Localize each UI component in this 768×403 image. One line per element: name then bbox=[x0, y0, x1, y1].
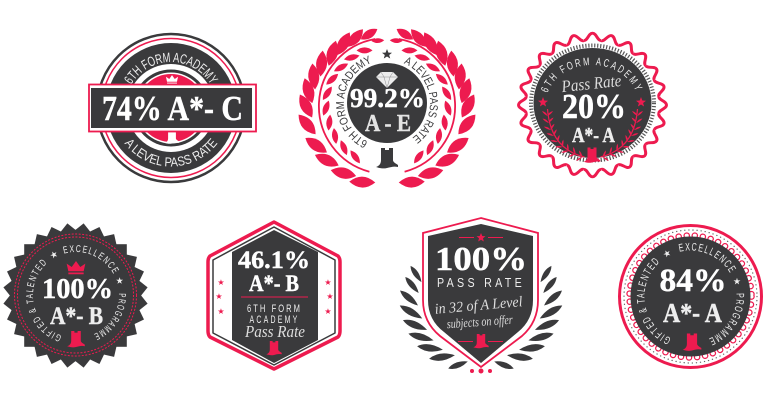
laurel right bbox=[493, 264, 564, 371]
hexagon outer bbox=[208, 222, 340, 369]
lower rules bbox=[458, 341, 503, 342]
grade: A*-A: A*- A bbox=[663, 298, 722, 328]
arc text: a level pass rate: A LEVEL PASS RATE bbox=[124, 138, 218, 167]
banner bbox=[89, 84, 256, 132]
divider bbox=[241, 296, 308, 298]
badge: 100% pass rate shield bbox=[398, 218, 564, 374]
side stars: ★ bbox=[324, 307, 332, 316]
icon: crown bbox=[166, 75, 178, 84]
arc text: programme: PROGRAMME bbox=[709, 294, 744, 346]
badge: 100% A*-B starburst bbox=[4, 223, 148, 368]
hexagon inner line bbox=[213, 227, 335, 365]
side stars bbox=[215, 278, 334, 316]
side stars: ★ bbox=[324, 278, 332, 287]
arc text: a level pass rate: A LEVEL PASS RATE bbox=[404, 57, 438, 144]
arc stars: ★ bbox=[50, 252, 58, 258]
laurel left bbox=[398, 264, 469, 371]
arc text: 6th form academy: 6TH FORM ACADEMY bbox=[541, 58, 642, 92]
figure: 99.2%: 99.2% bbox=[350, 83, 425, 113]
icon: crest bbox=[165, 130, 179, 144]
script: subjects on offer: subjects on offer bbox=[446, 312, 514, 331]
figure: 100%: 100% bbox=[435, 241, 527, 278]
icon: crest bbox=[376, 148, 398, 168]
main figure: 74% A*- C bbox=[102, 89, 243, 128]
arc text: gifted and talented: GIFTED & TALENTED bbox=[636, 258, 670, 344]
dark panel bbox=[232, 230, 318, 363]
icon: crest bbox=[266, 341, 282, 355]
shield body bbox=[428, 224, 533, 363]
text: pass rate: PASS RATE bbox=[437, 275, 525, 290]
arc text: 6th form academy: 6TH FORM ACADEMY bbox=[336, 56, 370, 148]
side stars: ★ bbox=[217, 278, 225, 287]
scalloped edge bbox=[518, 33, 666, 177]
dark disc bbox=[630, 236, 750, 356]
side stars: ★ bbox=[215, 292, 223, 301]
badge: 99.2% A-E laurel wreath bbox=[298, 28, 476, 188]
top star and rules bbox=[459, 233, 503, 242]
arc text: gifted and talented: GIFTED & TALENTED bbox=[26, 260, 61, 342]
grade: A*-A: A*- A bbox=[572, 123, 616, 147]
figure: 100%: 100% bbox=[42, 273, 113, 305]
script: pass rate: Pass Rate bbox=[244, 322, 305, 341]
icon: star bbox=[382, 49, 392, 58]
arc star right: ★ bbox=[734, 278, 740, 284]
icon: crest bbox=[67, 331, 85, 347]
outer ring bbox=[620, 226, 762, 368]
banner panel bbox=[91, 88, 252, 128]
laurel wreath right bbox=[390, 26, 480, 188]
text: academy: ACADEMY bbox=[250, 314, 300, 326]
starburst seal bbox=[3, 223, 148, 368]
laurel right bbox=[600, 109, 643, 162]
arc text: excellence: EXCELLENCE bbox=[63, 245, 120, 274]
arc text: 6th form academy: 6TH FORM ACADEMY bbox=[124, 52, 218, 84]
laurel wreath left bbox=[294, 26, 384, 188]
shield outline bbox=[423, 218, 538, 367]
figure: 84%: 84% bbox=[660, 263, 726, 299]
grade: A*-B: A*- B bbox=[50, 303, 103, 330]
badge: 46.1% A*-B hexagon bbox=[208, 222, 340, 369]
bottom dots bbox=[470, 368, 492, 374]
arc star left: ★ bbox=[664, 250, 670, 258]
script: in 32 of A Level: in 32 of A Level bbox=[434, 294, 523, 318]
arc text: excellence: EXCELLENCE bbox=[678, 242, 736, 273]
badge: 74% A*-C pass rate bbox=[88, 32, 257, 184]
side stars: ★ bbox=[217, 307, 225, 316]
laurel left bbox=[542, 109, 584, 162]
text: 6th form: 6TH FORM bbox=[247, 303, 302, 315]
icon: diamond bbox=[376, 72, 398, 88]
figure: 46.1%: 46.1% bbox=[238, 247, 310, 274]
badge: 84% A*-A round bbox=[618, 224, 763, 369]
icon: crest bbox=[584, 148, 600, 163]
side stars: ★ bbox=[326, 292, 334, 301]
figure: 20%: 20% bbox=[562, 87, 626, 126]
icon: crown bbox=[67, 261, 85, 274]
script: pass rate: Pass Rate bbox=[560, 71, 623, 96]
badge: 20% A*-A scalloped bbox=[517, 32, 668, 178]
arc text: programme: PROGRAMME bbox=[94, 294, 126, 340]
grade: A*-B: A*- B bbox=[249, 271, 299, 296]
stars bbox=[538, 97, 646, 106]
arc star right: ★ bbox=[116, 277, 123, 284]
centre disc bbox=[347, 63, 427, 143]
icon: crest bbox=[473, 334, 489, 348]
icon: crest bbox=[683, 334, 701, 351]
grade: A-E: A - E bbox=[365, 111, 411, 137]
dark disc bbox=[534, 48, 652, 158]
